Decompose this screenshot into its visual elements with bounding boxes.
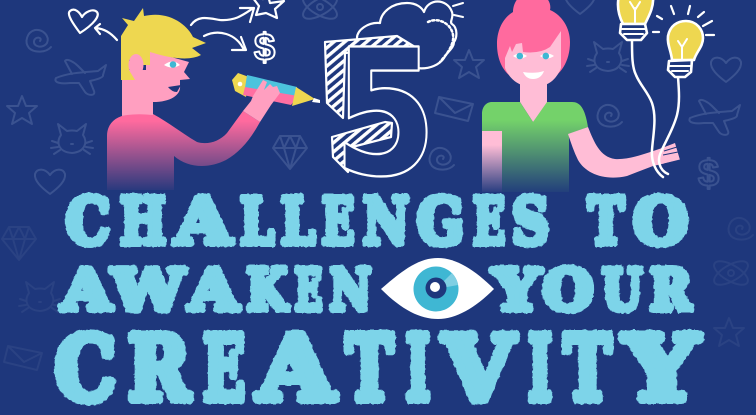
man hand bbox=[243, 80, 280, 122]
woman shirt bbox=[482, 102, 588, 192]
man eye bbox=[164, 62, 180, 68]
man head and neck bbox=[122, 50, 190, 116]
icon: dollar: $ bbox=[254, 27, 275, 69]
man hair bbox=[121, 8, 206, 80]
faint lower doodles bbox=[2, 218, 753, 370]
5 numeral: 5 bbox=[333, 13, 437, 216]
cloud bbox=[357, 2, 456, 68]
title line 1: G bbox=[417, 184, 464, 260]
title line 2 left: A bbox=[188, 258, 240, 324]
woman right arm bbox=[568, 127, 680, 178]
woman figure bbox=[482, 0, 680, 192]
title line 2 left: E bbox=[295, 258, 322, 324]
woman face bbox=[505, 31, 561, 87]
woman neck bbox=[520, 80, 547, 122]
man ear bbox=[128, 54, 144, 76]
title line 2 right: Y bbox=[492, 258, 541, 324]
title line 1: A bbox=[174, 184, 233, 260]
white doodles: idea arrows, heart, star, dollar bbox=[69, 0, 284, 69]
icon: star bbox=[253, 0, 284, 18]
title line 1: S bbox=[512, 184, 549, 260]
title line 2 left: N bbox=[330, 258, 371, 324]
title line 2 right: U bbox=[602, 258, 642, 324]
title line 1: O bbox=[633, 184, 688, 260]
title line 2 left: A bbox=[61, 258, 113, 324]
icon: heart bbox=[69, 10, 98, 33]
man figure bbox=[107, 8, 320, 190]
man iris bbox=[170, 61, 176, 68]
pencil bbox=[232, 73, 320, 106]
icon: eye bbox=[381, 258, 494, 319]
woman smile bbox=[523, 71, 544, 79]
man shirt bbox=[107, 111, 260, 190]
arrow to star bbox=[191, 8, 254, 25]
title bbox=[55, 184, 700, 415]
woman hand fingers bbox=[663, 147, 680, 164]
title line 2 right: R bbox=[650, 258, 691, 324]
title line 2 right: O bbox=[543, 258, 593, 324]
title line 1: H bbox=[120, 184, 166, 260]
woman hair bbox=[497, 0, 570, 80]
man mouth bbox=[168, 85, 181, 92]
bulb 2 bbox=[668, 21, 703, 77]
title line 1: C bbox=[66, 184, 110, 260]
cloud hatch bbox=[428, 20, 453, 62]
bulb 1 bbox=[618, 0, 653, 40]
title line 1: L bbox=[281, 184, 315, 260]
background doodles: $ bbox=[698, 153, 719, 195]
title line 1: N bbox=[363, 184, 409, 260]
arrow to dollar bbox=[204, 33, 246, 50]
title line 1: T bbox=[588, 184, 624, 260]
title line 1: L bbox=[240, 184, 274, 260]
light bulbs bbox=[618, 0, 714, 177]
woman irises bbox=[516, 53, 549, 59]
bulb rays bbox=[653, 6, 714, 35]
title line 1: E bbox=[322, 184, 354, 260]
bulb strings bbox=[632, 40, 679, 177]
arrow to heart bbox=[95, 24, 117, 40]
title line 1: E bbox=[473, 184, 505, 260]
woman left arm bbox=[482, 131, 502, 192]
woman eyes bbox=[513, 54, 554, 58]
number 5 with cloud bbox=[325, 2, 463, 216]
5 stripes bbox=[325, 36, 415, 172]
background doodles bbox=[7, 0, 741, 195]
title line 2 left: W bbox=[111, 258, 185, 324]
sun rays bbox=[453, 3, 463, 17]
title line 2 left: K bbox=[247, 258, 289, 324]
